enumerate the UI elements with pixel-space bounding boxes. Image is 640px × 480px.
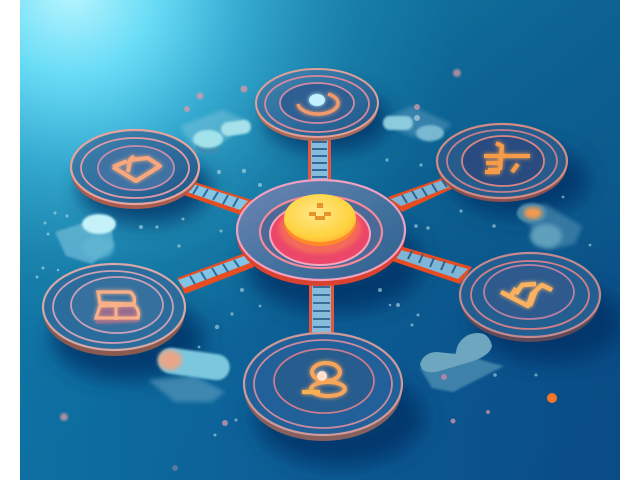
node: right	[460, 253, 600, 342]
node: upper left	[71, 130, 199, 209]
glass blob: lower left with glow	[148, 346, 231, 402]
connector: upper right	[388, 178, 452, 212]
icon: box glyph	[113, 156, 160, 181]
connector: right	[392, 246, 472, 284]
node: bottom	[244, 333, 402, 441]
icon: stacked glyph	[96, 292, 139, 324]
connector: left	[177, 252, 254, 294]
icon: gold coin	[284, 194, 356, 246]
node: upper right	[437, 124, 567, 202]
droplets and particles	[36, 69, 591, 471]
icon: clover glyph	[302, 363, 345, 396]
node: left	[43, 264, 185, 356]
icon: hand glyph	[501, 284, 552, 306]
hub: central node	[237, 180, 405, 286]
glass blob: upper left	[180, 110, 252, 154]
glass blob: right with glow	[517, 203, 582, 250]
node: top	[256, 69, 378, 141]
glass blob: left	[55, 214, 116, 264]
connector: bottom	[309, 285, 334, 333]
disc shadows	[52, 88, 624, 466]
connector: upper left	[184, 182, 252, 215]
glass blob: lower right	[420, 333, 504, 392]
icon: scales glyph	[484, 143, 530, 172]
glass blob: upper right	[383, 106, 452, 142]
connector: top	[308, 140, 331, 180]
icon: ring with light	[298, 94, 338, 114]
